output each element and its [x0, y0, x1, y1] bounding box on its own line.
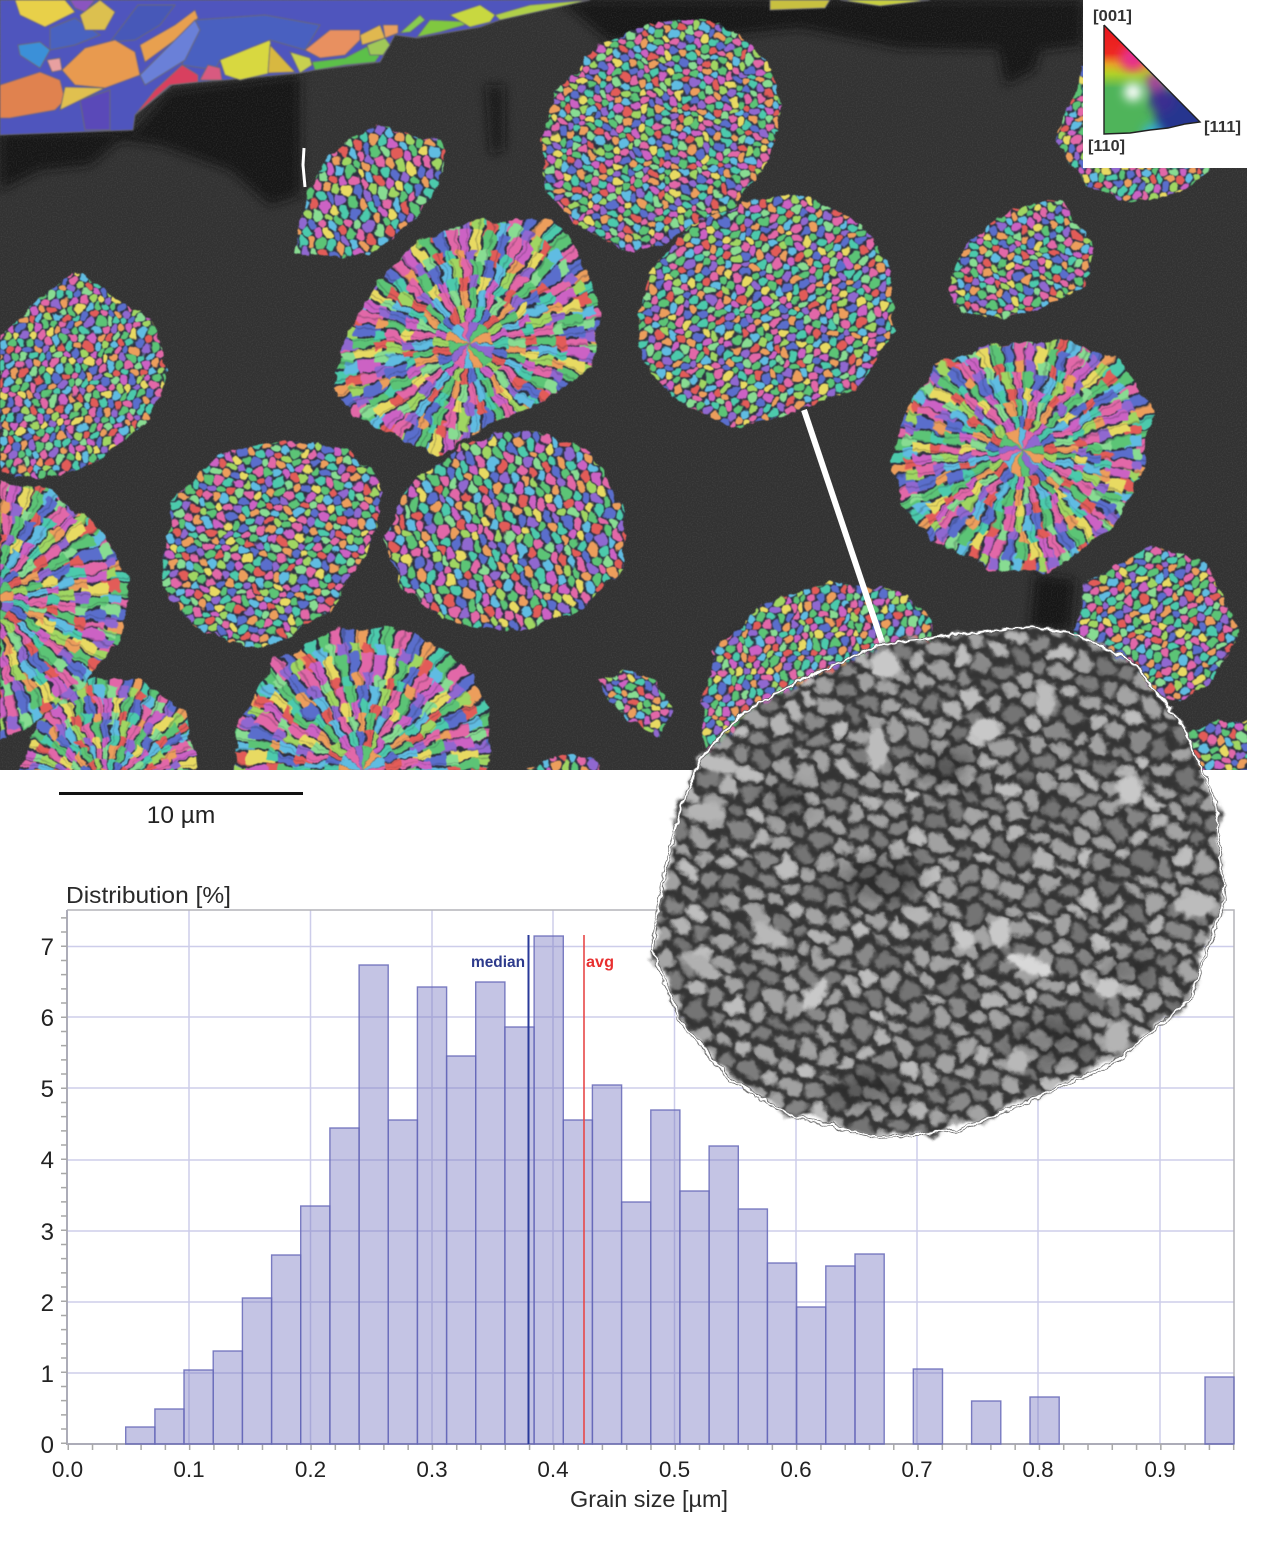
x axis labels: 0.0 [52, 1457, 83, 1482]
grain cluster: bottom radial [233, 625, 492, 770]
scale bar [59, 792, 303, 829]
grain cluster: behind inset [702, 584, 932, 760]
legend labels: [110] [1088, 138, 1125, 155]
chart grid and frame [64, 910, 1236, 1447]
x axis title: Grain size [µm] [570, 1486, 728, 1512]
x axis labels: 0.9 [1144, 1457, 1176, 1482]
x axis labels: 0.7 [901, 1457, 933, 1482]
dark matrix background [0, 0, 1247, 770]
y axis labels: 3 [41, 1219, 54, 1246]
grain cluster: top right partial [1055, 70, 1212, 203]
legend labels: [111] [1204, 119, 1241, 136]
legend labels: [001] [1093, 8, 1132, 25]
y axis labels: 0 [41, 1432, 54, 1459]
x axis labels: 0.5 [659, 1457, 690, 1482]
grain cluster: lower centre [385, 428, 625, 632]
spherulite grains [0, 18, 1247, 770]
x axis labels: 0.3 [416, 1457, 448, 1482]
grain cluster: radial right [890, 338, 1156, 575]
y axis labels: 5 [41, 1076, 54, 1103]
grain cluster: upper centre [540, 20, 785, 250]
x axis labels [52, 1457, 1176, 1482]
micrograph: EBSD orientation map [0, 0, 1247, 770]
grain cluster: lower right [1073, 545, 1238, 700]
y axis labels [41, 934, 54, 1459]
legend labels [1088, 8, 1241, 155]
top polycrystalline band with large grains [0, 0, 930, 135]
grain cluster: bottom centre sliver [525, 753, 600, 770]
y axis title: Distribution [%] [66, 882, 231, 908]
histogram: grain size distribution [41, 882, 1236, 1512]
median marker: median [471, 954, 525, 971]
legend: inverse pole figure colour key [1083, 0, 1247, 168]
grain cluster: small upper left [290, 125, 445, 258]
y axis labels: 1 [41, 1361, 54, 1388]
average marker: avg [586, 954, 614, 971]
y axis labels: 2 [41, 1290, 54, 1317]
scale bar: 10 µm [147, 802, 215, 829]
y axis labels: 4 [41, 1147, 54, 1174]
grain cluster: radial large centre [333, 217, 602, 458]
grain cluster: small right [950, 200, 1095, 320]
x axis labels: 0.6 [780, 1457, 812, 1482]
white artefact speck [303, 148, 305, 187]
grain cluster: left edge [0, 270, 167, 480]
histogram bars [126, 936, 1234, 1444]
grain cluster: left edge radial [0, 480, 130, 740]
x axis labels: 0.2 [295, 1457, 326, 1482]
x axis labels: 0.8 [1022, 1457, 1054, 1482]
grain cluster: fine centre, linked to inset [636, 195, 895, 428]
x axis labels: 0.1 [173, 1457, 205, 1482]
y axis labels: 7 [41, 934, 54, 961]
grain cluster: lower left [162, 438, 385, 650]
grain cluster: tiny centre [598, 668, 672, 738]
inset: grayscale micrograph of spherulite [652, 627, 1225, 1138]
y axis labels: 6 [41, 1005, 54, 1032]
connector line from spherulite to inset [804, 410, 883, 645]
grain cluster: bottom right edge [1188, 718, 1247, 770]
x axis labels: 0.4 [537, 1457, 569, 1482]
icon: orientation colour triangle [1103, 24, 1202, 135]
grain cluster: bottom left [18, 676, 198, 770]
